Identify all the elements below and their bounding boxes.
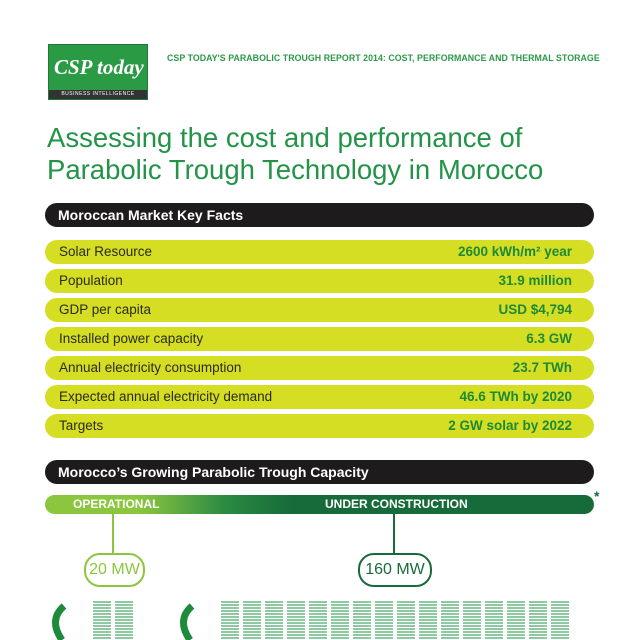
logo xyxy=(48,44,148,100)
status gradient bar: OPERATIONAL xyxy=(73,497,159,511)
header text: CSP TODAY'S PARABOLIC TROUGH REPORT 2014: COST, PERFORMANCE AND THERMAL STORAGE xyxy=(167,53,600,63)
row: demand: 46.6 TWh by 2020 xyxy=(459,389,572,404)
row: population: 31.9 million xyxy=(498,273,572,288)
row: capacity: Installed power capacity xyxy=(59,331,203,346)
row: consumption: 23.7 TWh xyxy=(513,360,572,375)
row: population: Population xyxy=(59,273,123,288)
row: capacity xyxy=(45,327,594,351)
label 160 MW: 160 MW xyxy=(365,561,425,578)
construction columns xyxy=(221,601,569,639)
row: population xyxy=(45,269,594,293)
row: demand: Expected annual electricity demand xyxy=(59,389,272,404)
row: demand xyxy=(45,385,594,409)
logo: BUSINESS INTELLIGENCE xyxy=(61,91,135,97)
row: solar: Solar Resource xyxy=(59,244,152,259)
key facts heading xyxy=(45,203,594,227)
asterisk: * xyxy=(594,488,599,504)
title: Assessing the cost and performance of xyxy=(47,122,522,153)
icon: trough mirrors xyxy=(52,603,194,640)
row: targets: Targets xyxy=(59,418,103,433)
capacity heading xyxy=(45,460,594,484)
title: Parabolic Trough Technology in Morocco xyxy=(47,154,543,185)
logo: CSP today xyxy=(54,55,144,79)
label 20 MW: 20 MW xyxy=(89,561,140,578)
title xyxy=(47,122,543,185)
row: solar: 2600 kWh/m² year xyxy=(458,244,572,259)
row: gdp: USD $4,794 xyxy=(498,302,572,317)
key facts heading: Moroccan Market Key Facts xyxy=(58,207,243,223)
facts table xyxy=(45,240,594,438)
connector lines xyxy=(112,514,114,554)
row: solar xyxy=(45,240,594,264)
operational columns xyxy=(93,601,133,639)
row: targets: 2 GW solar by 2022 xyxy=(448,418,572,433)
row: gdp: GDP per capita xyxy=(59,302,151,317)
capacity heading: Morocco’s Growing Parabolic Trough Capacity xyxy=(58,464,369,480)
status gradient bar xyxy=(45,495,594,514)
row: consumption xyxy=(45,356,594,380)
row: capacity: 6.3 GW xyxy=(526,331,572,346)
row: consumption: Annual electricity consumption xyxy=(59,360,241,375)
status gradient bar: UNDER CONSTRUCTION xyxy=(325,497,468,511)
label 20 MW xyxy=(84,553,145,587)
row: targets xyxy=(45,414,594,438)
label 160 MW xyxy=(358,553,432,587)
row: gdp xyxy=(45,298,594,322)
